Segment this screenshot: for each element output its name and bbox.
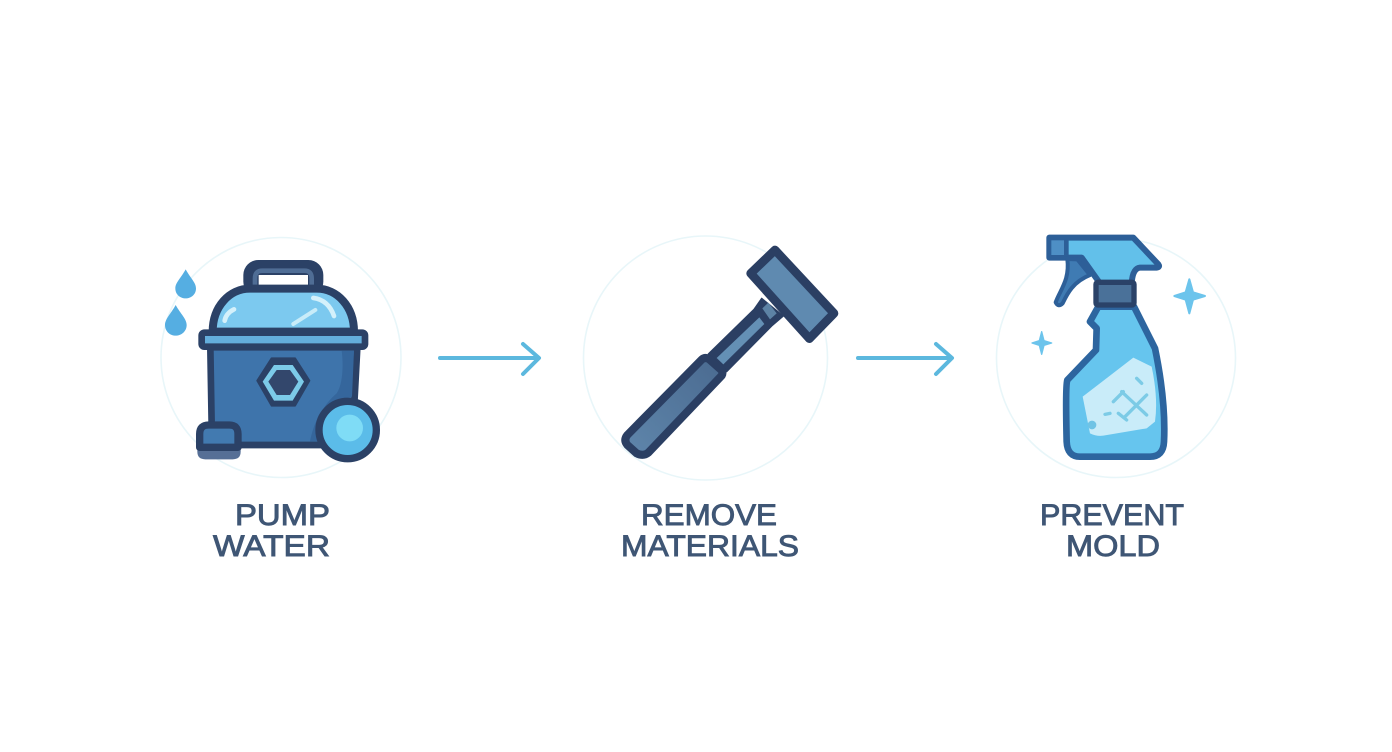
icon ring: remove materials xyxy=(584,236,828,480)
arrow: step two to three xyxy=(858,344,952,374)
label: remove materials xyxy=(621,499,799,563)
panel: remove materials xyxy=(584,236,834,563)
icon: spray bottle xyxy=(1032,238,1205,457)
arrow: step one to two xyxy=(440,344,539,374)
label: prevent mold: PREVENT xyxy=(1040,499,1184,532)
panel: pump water xyxy=(161,238,401,563)
label: pump water xyxy=(213,499,330,563)
icon ring: pump water xyxy=(161,238,401,478)
label: prevent mold: MOLD xyxy=(1066,530,1160,563)
icon: hammer xyxy=(625,250,834,455)
label: prevent mold xyxy=(1040,499,1184,563)
label: remove materials: REMOVE xyxy=(641,499,777,532)
label: pump water: PUMP xyxy=(235,499,330,532)
panel: prevent mold xyxy=(996,238,1236,563)
label: remove materials: MATERIALS xyxy=(621,530,799,563)
icon: wet vacuum xyxy=(165,260,376,459)
label: pump water: WATER xyxy=(213,530,330,563)
icon ring: prevent mold xyxy=(996,238,1236,478)
